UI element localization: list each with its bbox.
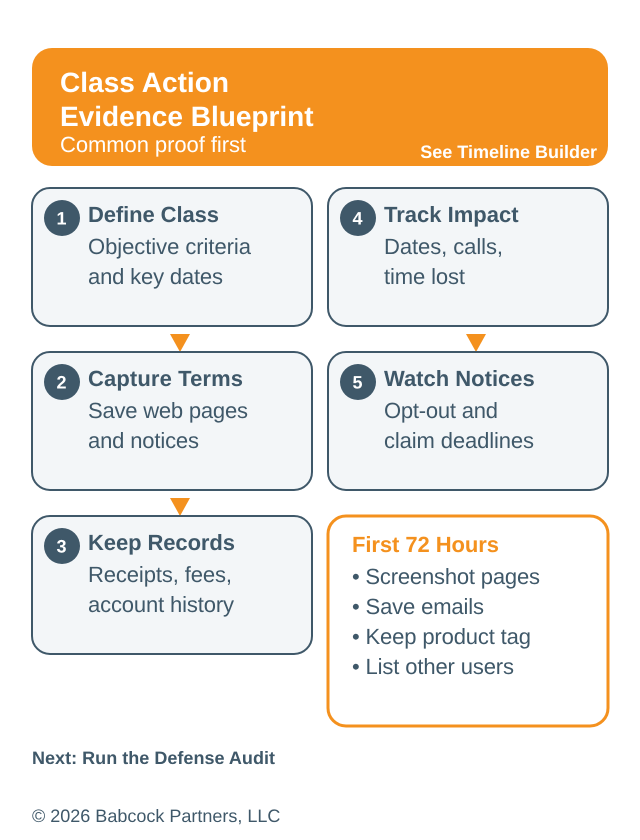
text block — [88, 234, 252, 289]
link: see timeline builder: See Timeline Builder — [420, 142, 597, 162]
arrow: step 4 to 5 — [466, 334, 486, 352]
text block: Receipts, fees, — [88, 562, 232, 587]
text block: Opt-out and — [384, 398, 498, 423]
icon: number 2: 2 — [56, 372, 67, 392]
checklist: • Screenshot pages — [352, 564, 540, 589]
text block: and key dates — [88, 264, 223, 289]
checklist — [352, 564, 540, 679]
icon: number 1: 1 — [56, 208, 67, 228]
panel: step 1 define class — [32, 188, 312, 326]
text block: and notices — [88, 428, 199, 453]
text block — [384, 398, 534, 453]
icon: number 5 — [340, 364, 376, 400]
text block: Dates, calls, — [384, 234, 503, 259]
arrow: step 2 to 3 — [170, 498, 190, 516]
copyright: © 2026 Babcock Partners, LLC — [32, 806, 280, 826]
heading: Define Class — [88, 202, 219, 227]
icon: number 2 — [44, 364, 80, 400]
icon: number 3: 3 — [56, 536, 67, 556]
icon: number 4: 4 — [352, 208, 363, 228]
text block — [88, 398, 248, 453]
panel: step 2 capture terms — [32, 352, 312, 490]
icon: number 4 — [340, 200, 376, 236]
text block: Save web pages — [88, 398, 248, 423]
panel: step 3 keep records — [32, 516, 312, 654]
text block — [384, 234, 503, 289]
title: Evidence Blueprint — [60, 101, 314, 132]
heading: First 72 Hours — [352, 532, 499, 557]
icon: number 1 — [44, 200, 80, 236]
panel: step 4 track impact — [328, 188, 608, 326]
subtitle: Common proof first — [60, 132, 246, 157]
text block — [88, 562, 234, 617]
heading: Track Impact — [384, 202, 519, 227]
heading: Capture Terms — [88, 366, 243, 391]
text block: account history — [88, 592, 234, 617]
next step link: Next: Run the Defense Audit — [32, 748, 275, 768]
checklist: • List other users — [352, 654, 514, 679]
header banner — [32, 48, 608, 166]
checklist: • Save emails — [352, 594, 484, 619]
arrow: step 1 to 2 — [170, 334, 190, 352]
heading: Keep Records — [88, 530, 235, 555]
text block: time lost — [384, 264, 465, 289]
checklist: • Keep product tag — [352, 624, 531, 649]
title: Class Action — [60, 67, 229, 98]
panel: step 5 watch notices — [328, 352, 608, 490]
panel: first 72 hours — [328, 516, 608, 726]
text block: Objective criteria — [88, 234, 252, 259]
heading: Watch Notices — [384, 366, 535, 391]
text block: claim deadlines — [384, 428, 534, 453]
icon: number 5: 5 — [352, 372, 363, 392]
title — [60, 67, 314, 132]
icon: number 3 — [44, 528, 80, 564]
